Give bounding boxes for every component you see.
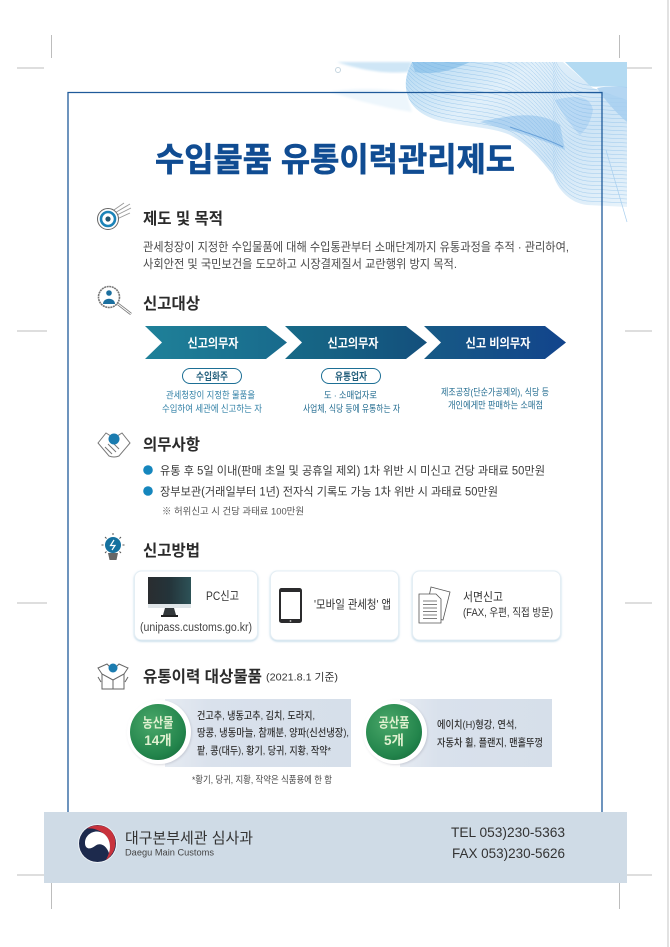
text: fax: FAX 053)230-5626	[452, 845, 565, 861]
section: report target	[98, 286, 566, 415]
heading: obligations: 의무사항	[143, 436, 200, 454]
arrow: non-obligated reporter	[424, 326, 566, 359]
arrow: obligated reporter 2: 신고의무자	[328, 336, 379, 350]
panel: industrial products: 공산품	[378, 716, 410, 730]
panel: agricultural products: 땅콩, 냉동마늘, 참깨분, 양파(신선냉장),	[197, 726, 349, 739]
bullet: reporting deadline: 유통 후 5일 이내(판매 초일 및 공휴일 제외) 1차 위반 시 미신고 건당 과태료 50만원	[160, 464, 545, 478]
column: importer: 관세청장이 지정한 물품을	[166, 390, 255, 402]
panel: industrial products	[363, 699, 552, 767]
section: target items	[98, 664, 552, 786]
bullet: record keeping: 장부보관(거래일부터 1년) 전자식 기록도 가능 1차 위반 시 과태료 50만원	[160, 484, 498, 498]
icon: magnifier with person	[98, 286, 131, 314]
main frame	[68, 92, 602, 812]
title: 수입물품 유통이력관리제도	[155, 141, 515, 178]
panel: agricultural products: 팥, 콩(대두), 황기, 당귀, 지황, 작약*	[197, 744, 331, 757]
text: telephone: TEL 053)230-5363	[451, 824, 565, 840]
column: distributor: 사업체, 식당 등에 유통하는 자	[303, 403, 400, 415]
icon: handshake	[98, 433, 130, 457]
footnote: *황기, 당귀, 지황, 작약은 식품용에 한 함	[192, 774, 332, 786]
arrow: non-obligated reporter: 신고 비의무자	[466, 336, 531, 350]
panel: industrial products: 자동차 휠, 플랜지, 맨홀뚜껑	[437, 736, 543, 749]
column: non-obligated: 개인에게만 판매하는 소매점	[448, 400, 543, 412]
section: report methods	[102, 533, 560, 640]
text: purpose description	[143, 240, 569, 271]
icon: open box	[98, 664, 128, 689]
panel: agricultural products	[127, 699, 351, 767]
heading: report methods: 신고방법	[143, 542, 200, 560]
card: paper report: 서면신고	[463, 590, 503, 604]
text: office name: 대구본부세관 심사과	[125, 830, 253, 847]
footer banner	[44, 812, 627, 883]
decorative wave ribbon	[334, 61, 628, 222]
section: system and purpose	[98, 203, 569, 271]
panel: agricultural products: 농산물	[142, 716, 174, 730]
text: purpose description: 관세청장이 지정한 수입물품에 대해 수입통관부터 소매단계까지 유통과정을 추적 · 관리하여,	[143, 240, 569, 254]
icon: monitor	[148, 577, 191, 617]
icon: documents	[419, 587, 450, 623]
arrow: obligated reporter 1	[145, 326, 287, 359]
text: purpose description: 사회안전 및 국민보건을 도모하고 시장결제질서 교란행위 방지 목적.	[143, 256, 457, 271]
panel: agricultural products: 건고추, 냉동고추, 김치, 도라지,	[197, 709, 315, 722]
heading: system and purpose: 제도 및 목적	[143, 210, 223, 228]
column: non-obligated: 제조공장(단순가공제외), 식당 등	[441, 386, 549, 398]
note: false report: ※ 허위신고 시 건당 과태료 100만원	[162, 506, 304, 518]
icon: tablet	[279, 588, 302, 623]
text: reference date: (2021.8.1 기준)	[266, 672, 338, 684]
card: paper report: (FAX, 우편, 직접 방문)	[463, 606, 553, 619]
column: importer: 수입하여 세관에 신고하는 자	[162, 403, 262, 415]
column: distributor: 도 · 소매업자로	[324, 390, 377, 402]
card: mobile app	[270, 571, 398, 640]
section: obligations	[98, 433, 545, 518]
heading: target items: 유통이력 대상물품	[143, 668, 262, 686]
column: importer: 수입화주	[196, 370, 228, 383]
card: PC report	[134, 571, 258, 640]
column: distributor	[303, 368, 400, 415]
card: PC report: PC신고	[206, 589, 239, 603]
column: importer	[162, 368, 262, 415]
column: distributor: 유통업자	[335, 370, 367, 383]
panel: agricultural products: 14개	[144, 733, 172, 748]
card: PC report: (unipass.customs.go.kr)	[140, 622, 252, 634]
heading: report target: 신고대상	[143, 295, 200, 313]
column: non-obligated	[441, 386, 549, 412]
panel: industrial products: 5개	[384, 733, 404, 748]
card: mobile app: '모바일 관세청' 앱	[314, 598, 391, 612]
panel: industrial products: 에이치(H)형강, 연석,	[437, 718, 517, 731]
icon: target	[98, 203, 131, 230]
arrow: obligated reporter 1: 신고의무자	[188, 336, 239, 350]
card: paper report	[412, 571, 560, 640]
arrow: obligated reporter 2	[285, 326, 427, 359]
text: english name: Daegu Main Customs	[125, 848, 215, 858]
logo: Taegeuk emblem	[78, 824, 117, 863]
icon: light bulb	[102, 533, 124, 560]
